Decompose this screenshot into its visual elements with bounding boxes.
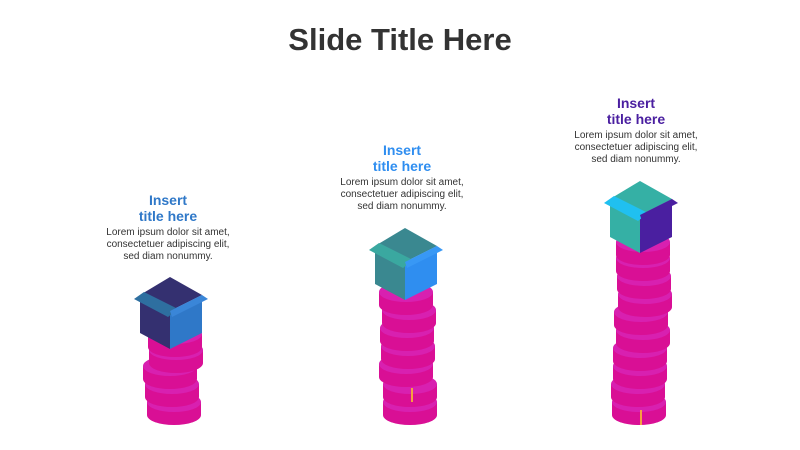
text block 3: consectetuer adipiscing elit, xyxy=(575,142,697,153)
text block 1: Insert xyxy=(149,192,187,208)
text block 1: Lorem ipsum dolor sit amet, xyxy=(106,227,230,238)
text block 1: sed diam nonummy. xyxy=(123,251,213,262)
house 1 xyxy=(134,277,208,349)
text block 1: consectetuer adipiscing elit, xyxy=(107,239,229,250)
text block 2: sed diam nonummy. xyxy=(357,201,447,212)
text block 3: Insert xyxy=(617,95,655,111)
text block 2: title here xyxy=(373,158,431,174)
text block 1: title here xyxy=(139,208,197,224)
stack 3 xyxy=(611,232,672,425)
text block 2: Insert xyxy=(383,142,421,158)
text block 2: Lorem ipsum dolor sit amet, xyxy=(340,177,464,188)
text block 3: Lorem ipsum dolor sit amet, xyxy=(574,130,698,141)
stack 2 xyxy=(379,282,437,425)
text block 2 xyxy=(340,142,464,212)
text block 3: title here xyxy=(607,111,665,127)
text block 3 xyxy=(574,95,698,165)
house 2 xyxy=(369,228,443,300)
text block 1 xyxy=(106,192,230,262)
title: Slide Title Here xyxy=(288,22,512,57)
house 3 xyxy=(604,181,678,253)
text block 3: sed diam nonummy. xyxy=(591,154,681,165)
text block 2: consectetuer adipiscing elit, xyxy=(341,189,463,200)
stack 1 xyxy=(143,324,203,425)
